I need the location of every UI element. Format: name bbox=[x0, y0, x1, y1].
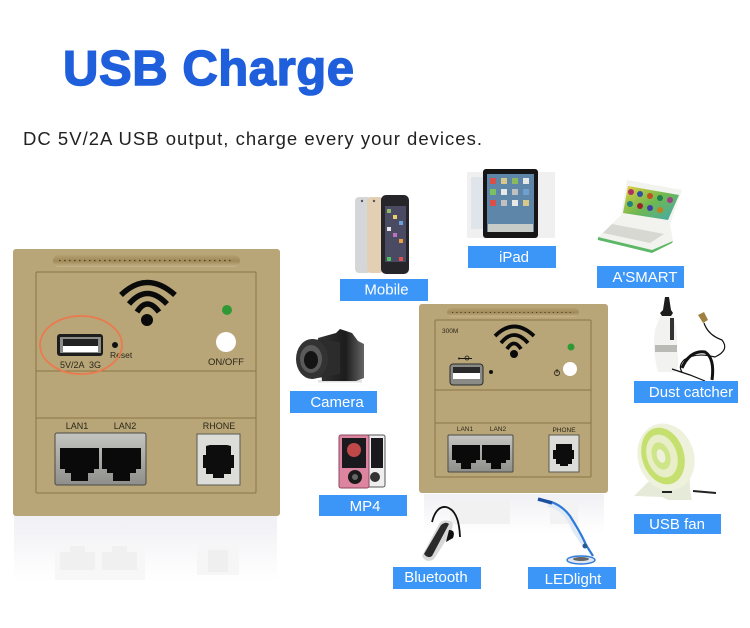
USB port bbox=[57, 334, 103, 356]
LAN ports bbox=[448, 435, 513, 472]
PHONE label: PHONE bbox=[552, 427, 576, 434]
LAN labels bbox=[66, 421, 136, 431]
on/off button bbox=[216, 332, 236, 352]
label: USB fan: USB fan bbox=[649, 516, 705, 533]
device: USB fan bbox=[629, 416, 716, 500]
label: Bluetooth bbox=[393, 567, 481, 589]
label: LEDlight: LEDlight bbox=[545, 571, 602, 588]
label: Mobile: Mobile bbox=[364, 282, 409, 298]
speaker strip bbox=[53, 255, 240, 267]
label: Mobile bbox=[340, 279, 428, 301]
label: Dust catcher bbox=[634, 381, 738, 403]
phone port bbox=[197, 434, 240, 485]
power LED bbox=[568, 344, 574, 350]
icon: wifi bbox=[121, 282, 175, 326]
label: USB fan bbox=[634, 514, 721, 534]
device: camera bbox=[296, 329, 364, 382]
reset pinhole bbox=[112, 342, 118, 348]
LAN labels: LAN1 bbox=[457, 426, 474, 433]
label: MP4: MP4 bbox=[350, 498, 380, 515]
highlight ring bbox=[40, 316, 122, 374]
icon: power symbol bbox=[554, 369, 560, 376]
reset label: Reset bbox=[110, 350, 133, 360]
device: dust catcher bbox=[654, 297, 725, 381]
label: A'SMART: A'SMART bbox=[612, 269, 678, 286]
RHONE label: RHONE bbox=[203, 421, 235, 431]
LAN labels: LAN2 bbox=[114, 421, 136, 431]
small panel reflection bbox=[424, 494, 604, 534]
phone port bbox=[549, 435, 579, 472]
on/off label: ON/OFF bbox=[208, 357, 244, 368]
small wall router panel bbox=[419, 304, 608, 493]
LAN ports bbox=[55, 433, 146, 485]
icon: usb symbol bbox=[458, 356, 472, 360]
device: LED lamp bbox=[538, 499, 595, 564]
label: iPad bbox=[468, 246, 556, 268]
panel frame bbox=[36, 272, 256, 493]
large panel reflection bbox=[14, 516, 277, 582]
power LED bbox=[222, 305, 232, 315]
label: Camera bbox=[290, 391, 377, 413]
subtitle: DC 5V/2A USB output, charge every your devices. bbox=[23, 128, 482, 149]
USB label: 5V/2A 3G bbox=[60, 360, 101, 370]
device: laptop bbox=[598, 180, 682, 253]
large wall router panel bbox=[13, 249, 280, 516]
label: LEDlight bbox=[528, 567, 616, 589]
label: Dust catcher: Dust catcher bbox=[649, 384, 733, 401]
label: iPad: iPad bbox=[499, 249, 529, 266]
label: A'SMART bbox=[597, 266, 684, 288]
device: iPad bbox=[467, 169, 555, 238]
speaker strip bbox=[447, 308, 579, 317]
label: Bluetooth: Bluetooth bbox=[404, 569, 468, 586]
label: MP4 bbox=[319, 495, 407, 516]
power button bbox=[563, 362, 577, 376]
device: bluetooth headset bbox=[422, 507, 460, 561]
LAN labels bbox=[457, 426, 507, 433]
reset pinhole bbox=[489, 370, 493, 374]
icon: wifi bbox=[495, 326, 534, 358]
LAN labels: LAN2 bbox=[490, 426, 507, 433]
panel frame bbox=[435, 320, 591, 477]
label: Camera: Camera bbox=[310, 394, 364, 411]
USB port bbox=[450, 364, 483, 385]
title: USB Charge bbox=[63, 42, 354, 96]
300M label: 300M bbox=[442, 328, 458, 335]
device: MP4 player bbox=[339, 435, 385, 488]
device: mobile phones bbox=[355, 195, 409, 274]
LAN labels: LAN1 bbox=[66, 421, 88, 431]
